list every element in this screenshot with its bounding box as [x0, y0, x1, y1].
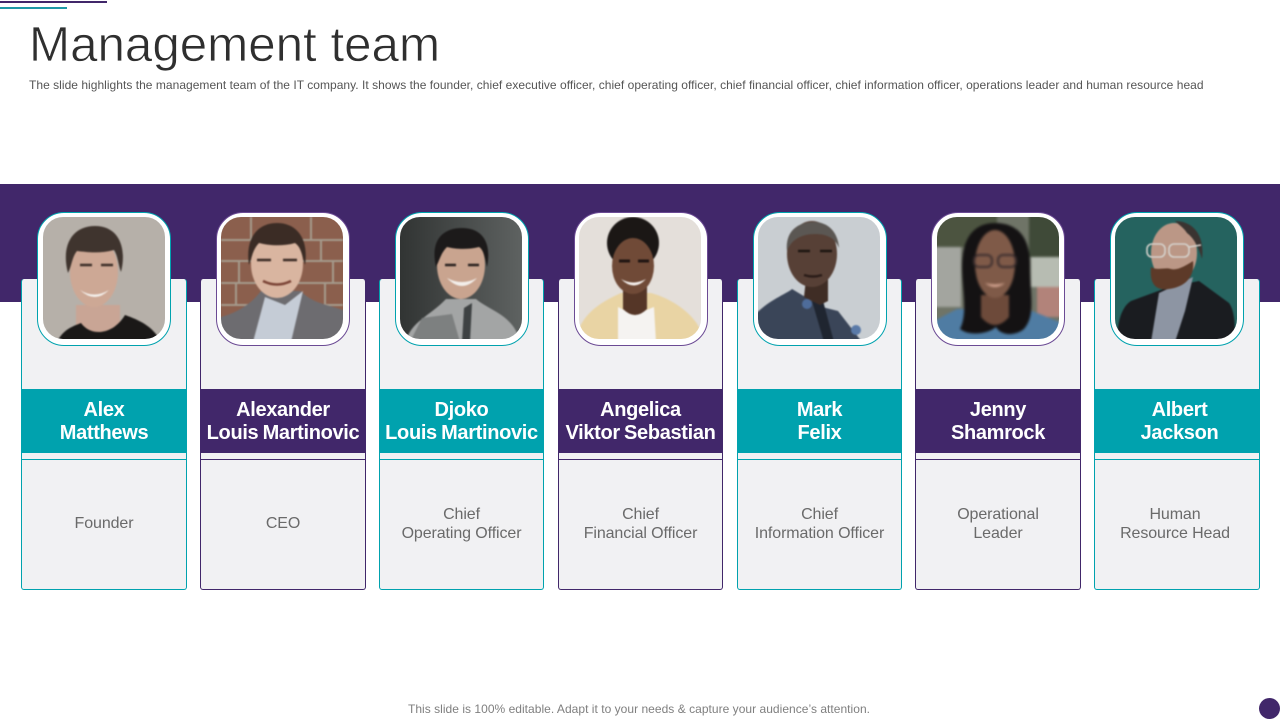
role: Chief Information Officer [755, 506, 884, 542]
team member: Alexander Louis Martinovic [200, 212, 366, 590]
portrait: Jenny [937, 217, 1059, 339]
photo frame: Djoko [395, 212, 529, 346]
name: Mark Felix: Felix [798, 422, 841, 444]
name: Djoko Louis Martinovic: Djoko [435, 399, 488, 421]
portrait: Djoko [400, 217, 522, 339]
photo frame: Alex [37, 212, 171, 346]
footer note: This slide is 100% editable. Adapt it to your needs & capture your audience’s attention. [408, 702, 870, 716]
team member: Alex Matthews [21, 212, 187, 590]
role: Chief Operating Officer [402, 506, 522, 542]
team member: Albert Jackson [1094, 212, 1260, 590]
page marker circle [1259, 698, 1280, 719]
role: Founder: Founder [75, 515, 133, 532]
role: Chief Financial Officer [584, 506, 698, 542]
role: Chief Operating Officer: Operating Officer [402, 524, 521, 542]
name: Angelica Viktor Sebastian: Angelica [600, 399, 681, 421]
name: Albert Jackson: Jackson [1141, 422, 1218, 444]
role: Operational Leader [957, 506, 1039, 542]
subtitle: The slide highlights the management team of the IT company. It shows the founder, chief executive officer, chief operating officer, chief financial officer, chief information officer, operations leader and human resource head [29, 78, 1204, 92]
name: Angelica Viktor Sebastian [558, 389, 723, 453]
portrait: Angelica [579, 217, 701, 339]
role: Chief Financial Officer: Chief [622, 506, 659, 522]
role: Chief Information Officer: Information Officer [755, 524, 884, 542]
photo frame: Alexander [216, 212, 350, 346]
role: Operational Leader: Leader [973, 524, 1023, 542]
decorative accent: top purple line [0, 1, 107, 3]
role: Human Resource Head: Resource Head [1120, 524, 1230, 542]
name: Jenny Shamrock [915, 389, 1081, 453]
photo frame: Angelica [574, 212, 708, 346]
team member: Djoko Louis Martinovic [379, 212, 544, 590]
role: Operational Leader: Operational [957, 506, 1039, 522]
role: Chief Information Officer: Chief [801, 506, 838, 522]
name: Alexander Louis Martinovic: Alexander [236, 399, 330, 421]
photo frame: Jenny [931, 212, 1065, 346]
name: Jenny Shamrock: Jenny [970, 399, 1026, 421]
portrait: Alexander [221, 217, 343, 339]
title: Management team [29, 17, 440, 72]
name: Alex Matthews [21, 389, 187, 453]
name: Alex Matthews: Matthews [60, 422, 148, 444]
team member: Mark Felix [737, 212, 902, 590]
name: Mark Felix: Mark [797, 399, 842, 421]
name: Albert Jackson [1094, 389, 1260, 453]
portrait: Albert [1115, 217, 1237, 339]
role: Chief Operating Officer: Chief [443, 506, 480, 522]
purple banner [0, 184, 1280, 302]
portrait: Alex [43, 217, 165, 339]
photo frame: Mark [753, 212, 887, 346]
portrait: Mark [758, 217, 880, 339]
name: Alexander Louis Martinovic: Louis Martinovic [207, 422, 359, 444]
role: Chief Financial Officer: Financial Officer [584, 524, 697, 542]
team member: Angelica Viktor Sebastian [558, 212, 723, 590]
team member: Jenny Shamrock [915, 212, 1081, 590]
name: Alex Matthews: Alex [84, 399, 124, 421]
photo frame: Albert [1110, 212, 1244, 346]
name: Jenny Shamrock: Shamrock [951, 422, 1045, 444]
name: Mark Felix [737, 389, 902, 453]
name: Djoko Louis Martinovic: Louis Martinovic [385, 422, 538, 444]
role: Human Resource Head [1120, 506, 1230, 542]
name: Angelica Viktor Sebastian: Viktor Sebastian [565, 422, 716, 444]
role: CEO: CEO [266, 515, 300, 532]
name: Djoko Louis Martinovic [379, 389, 544, 453]
role: Human Resource Head: Human [1149, 506, 1201, 522]
decorative accent: top teal line [0, 7, 67, 9]
name: Albert Jackson: Albert [1152, 399, 1207, 421]
name: Alexander Louis Martinovic [200, 389, 366, 453]
